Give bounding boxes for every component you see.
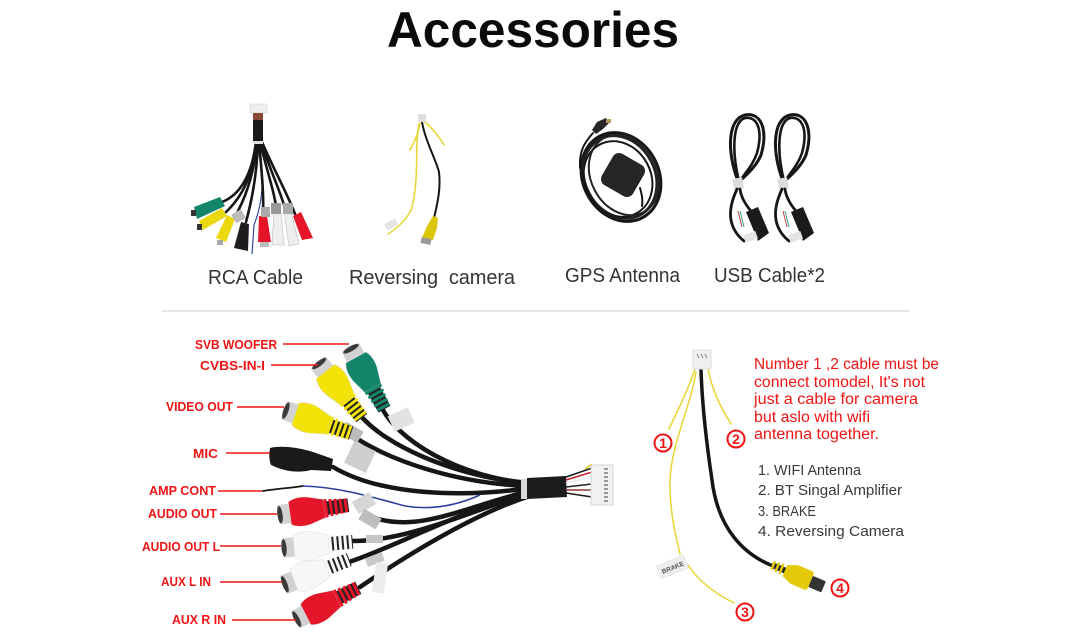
panel: RCA cable diagram (142, 338, 613, 633)
wire function list: 4. Reversing Camera (758, 523, 905, 540)
callout 1 (654, 434, 672, 452)
BRAKE tag: BRAKE (661, 560, 686, 576)
yellow wire 3 brake (670, 372, 734, 603)
caption: Reversing camera: Reversing camera (349, 267, 516, 289)
wire function list (758, 462, 905, 540)
label: AUX L IN (161, 575, 282, 589)
callout 3 (736, 604, 754, 620)
callout 4 (832, 580, 848, 596)
callout 2 (728, 430, 744, 448)
icon: reversing camera cable photo (384, 114, 444, 245)
label: VIDEO OUT: VIDEO OUT (166, 400, 233, 414)
label: AMP CONT: AMP CONT (149, 484, 216, 498)
panel: USB cable accessory (714, 115, 825, 287)
yellow wire 1 (669, 369, 695, 429)
wire function list: 2. BT Singal Amplifier (758, 482, 902, 499)
yellow wire 2 (708, 369, 731, 424)
label: AUX R IN (172, 613, 296, 627)
label: AUX L IN: AUX L IN (161, 575, 211, 589)
caption: GPS Antenna: GPS Antenna (565, 265, 681, 287)
label: AUDIO OUT (148, 507, 277, 521)
label: SVB WOOFER: SVB WOOFER (195, 338, 277, 352)
icon: USB cable photo right (775, 115, 814, 243)
label: CVBS-IN-I (200, 359, 318, 373)
red warning text: connect tomodel, It's not (754, 374, 926, 391)
connector: black mic (269, 447, 333, 472)
connector: white aux L in (277, 546, 354, 599)
icon: RCA cable photo (191, 104, 313, 254)
red warning text: Number 1 ,2 cable must be (754, 356, 939, 373)
callout 4: 4 (836, 580, 844, 596)
label: MIC (193, 447, 270, 461)
connector: white audio out L (280, 527, 354, 562)
connector: red aux R in (288, 575, 365, 633)
black camera wire (701, 370, 773, 566)
icon: GPS antenna photo (566, 118, 676, 235)
connector: yellow CVBS in (306, 353, 373, 427)
red warning text (753, 356, 939, 443)
label: VIDEO OUT (166, 400, 284, 414)
connector: red audio out (275, 491, 350, 529)
caption: USB Cable*2: USB Cable*2 (714, 265, 825, 287)
yellow camera plug (768, 556, 827, 596)
red warning text: but aslo with wifi (754, 409, 870, 426)
panel: reversing camera cable diagram (654, 350, 939, 620)
white harness connector (591, 465, 613, 505)
label: AUDIO OUT: AUDIO OUT (148, 507, 217, 521)
panel: reversing camera accessory (349, 114, 516, 289)
callout 3: 3 (741, 604, 749, 620)
connector: green SVB woofer (337, 339, 397, 416)
white connector (693, 350, 711, 369)
panel: RCA cable accessory (191, 104, 313, 289)
caption: RCA Cable: RCA Cable (208, 267, 303, 289)
callout 1: 1 (659, 435, 667, 451)
connector: yellow video out (279, 396, 356, 447)
wire function list: 3. BRAKE (758, 503, 816, 520)
title: Accessories (387, 2, 679, 58)
BRAKE tag (656, 555, 689, 579)
label: AMP CONT (149, 484, 262, 498)
wire bundle (263, 404, 592, 587)
wire tags (340, 407, 415, 594)
callout 2: 2 (732, 431, 740, 447)
label: MIC: MIC (193, 447, 218, 461)
label: AUX R IN: AUX R IN (172, 613, 226, 627)
label: AUDIO OUT L: AUDIO OUT L (142, 540, 220, 554)
label: AUDIO OUT L (142, 540, 281, 554)
red warning text: antenna together. (754, 426, 879, 443)
panel: GPS antenna accessory (565, 118, 681, 287)
wire function list: 1. WIFI Antenna (758, 462, 862, 479)
label: CVBS-IN-I: CVBS-IN-I (200, 359, 265, 373)
icon: USB cable photo left (730, 115, 769, 243)
red warning text: just a cable for camera (753, 391, 918, 408)
